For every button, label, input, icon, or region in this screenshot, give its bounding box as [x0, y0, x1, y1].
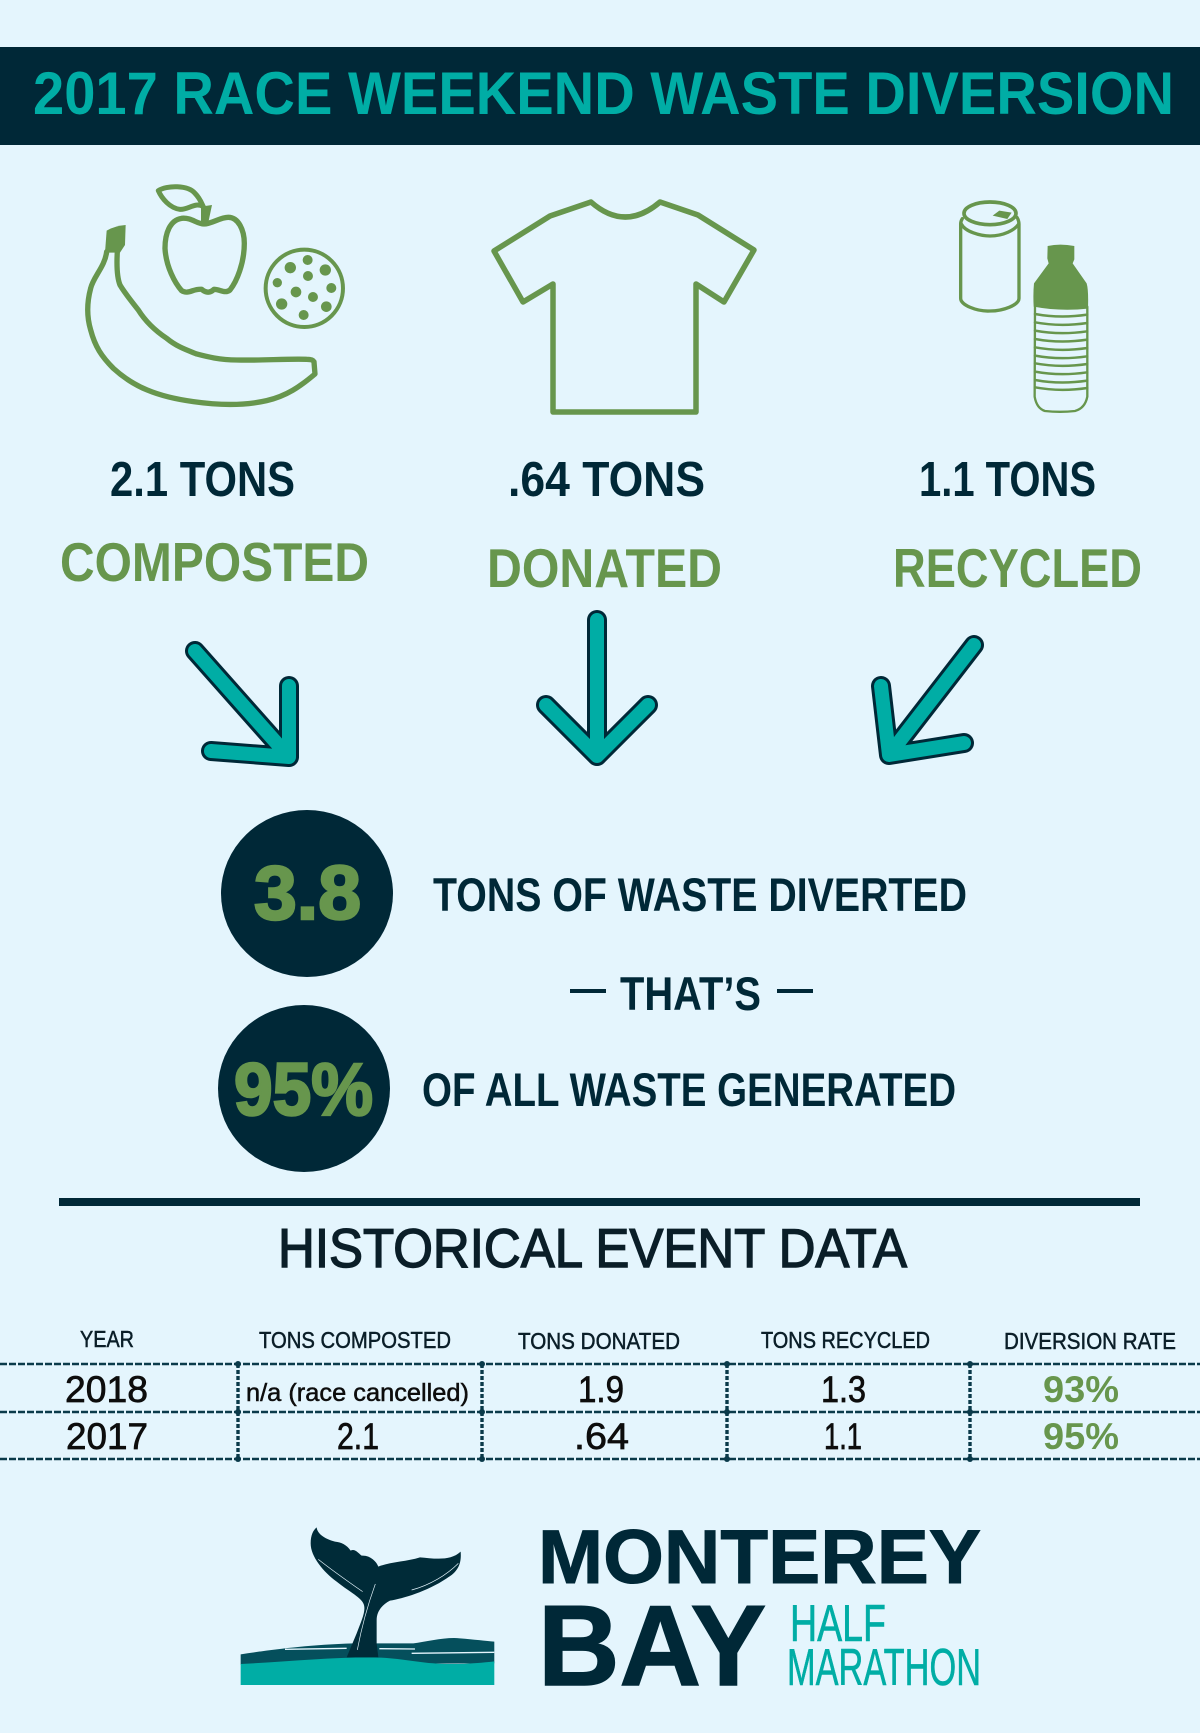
label: recycled: RECYCLED [893, 537, 1142, 599]
logo: Monterey Bay Half Marathon: HALF [790, 1595, 886, 1653]
amount: recycled: 1.1 TONS [919, 453, 1096, 507]
table row: 2018: 1.3 [821, 1369, 866, 1410]
table: historical data [0, 1326, 1200, 1462]
stat: tons diverted [221, 810, 967, 977]
table row: 2018: n/a (race cancelled) [246, 1379, 469, 1407]
title banner [0, 47, 1200, 145]
logo: Monterey Bay Half Marathon [241, 1515, 981, 1710]
connector: that's [570, 967, 813, 1020]
arrow: recycled [881, 645, 974, 755]
table header row: TONS DONATED [518, 1328, 680, 1354]
table header row: YEAR [80, 1326, 134, 1352]
stat: tons diverted: 3.8 [254, 851, 361, 936]
heading: historical event data: HISTORICAL EVENT DATA [278, 1217, 907, 1279]
logo: Monterey Bay Half Marathon: BAY [538, 1583, 766, 1710]
label: donated: DONATED [487, 537, 722, 599]
table header row: DIVERSION RATE [1004, 1328, 1176, 1354]
amount: composted: 2.1 TONS [110, 453, 295, 507]
logo: Monterey Bay Half Marathon: MARATHON [787, 1639, 981, 1697]
panel: composted [60, 187, 369, 757]
stat: percent of waste: 95% [234, 1048, 373, 1131]
logo: Monterey Bay Half Marathon: MONTEREY [538, 1515, 981, 1600]
arrow: donated [546, 620, 648, 756]
stat: percent of waste [218, 1005, 956, 1172]
stat: tons diverted: TONS OF WASTE DIVERTED [433, 868, 967, 921]
table header row [80, 1326, 1176, 1354]
table row: 2017 [66, 1416, 1119, 1457]
icon: can and bottle [961, 202, 1088, 412]
connector: that's: THAT’S [620, 967, 761, 1020]
table row: 2018: 1.9 [578, 1369, 624, 1410]
table row: 2017: 2017 [66, 1416, 148, 1457]
label: composted: COMPOSTED [60, 531, 369, 593]
table row: 2017: 1.1 [824, 1416, 862, 1457]
table row: 2018: 2018 [65, 1369, 148, 1410]
table row: 2017: 2.1 [337, 1416, 379, 1457]
icon: t-shirt [494, 202, 754, 412]
stat: percent of waste: OF ALL WASTE GENERATED [422, 1063, 956, 1116]
table row: 2018: 93% [1043, 1369, 1119, 1410]
amount: donated: .64 TONS [508, 453, 705, 507]
table row: 2017: .64 [574, 1416, 629, 1457]
arrow: composted [195, 651, 289, 757]
table header row: TONS RECYCLED [761, 1327, 930, 1353]
table header row: TONS COMPOSTED [259, 1327, 451, 1353]
icon: whale tail [241, 1527, 494, 1685]
table row: 2018 [65, 1369, 1119, 1410]
panel: donated [487, 202, 754, 756]
icon: banana, apple and cookie [88, 187, 343, 404]
table row: 2017: 95% [1043, 1416, 1119, 1457]
panel: recycled [881, 202, 1142, 755]
